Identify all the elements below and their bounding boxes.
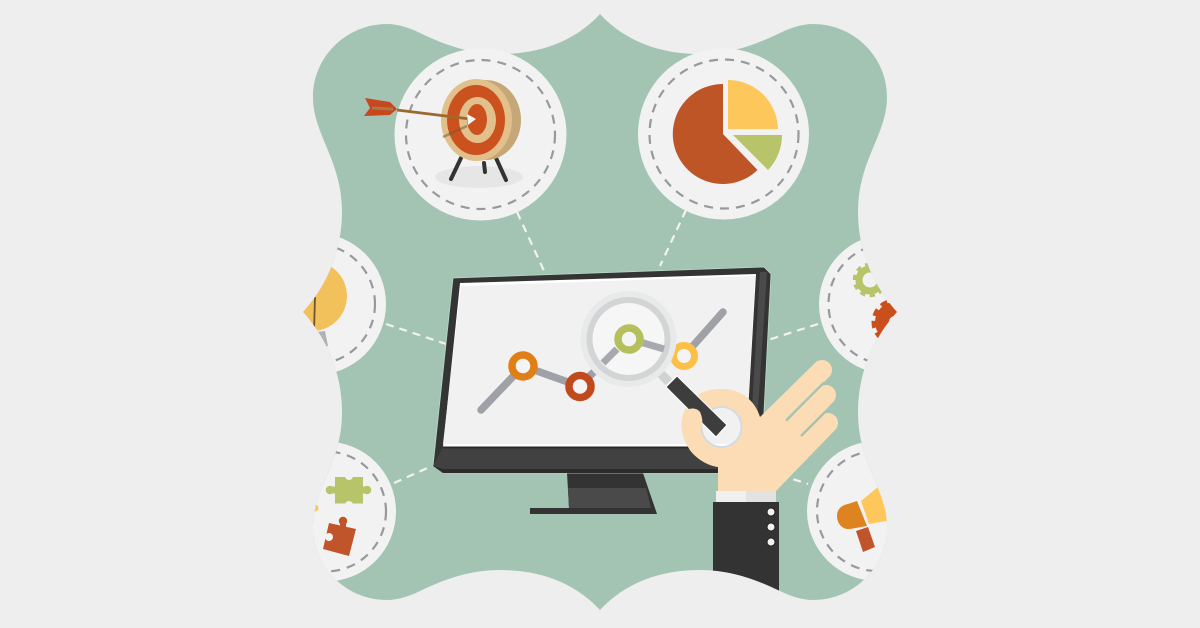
dashed connectors	[386, 210, 818, 484]
monitor	[433, 267, 771, 514]
panel: target circle	[364, 48, 566, 220]
panel: pie chart circle	[638, 48, 809, 220]
panel: puzzle circle	[313, 442, 396, 580]
illustration	[303, 14, 897, 610]
magnifying glass	[580, 291, 676, 387]
scalloped frame	[303, 14, 897, 610]
line chart	[481, 312, 723, 410]
panel: gears circle	[819, 240, 897, 370]
panel: megaphone circle	[807, 442, 887, 580]
hand with sleeve	[666, 360, 838, 602]
panel: light bulb circle	[303, 238, 386, 372]
